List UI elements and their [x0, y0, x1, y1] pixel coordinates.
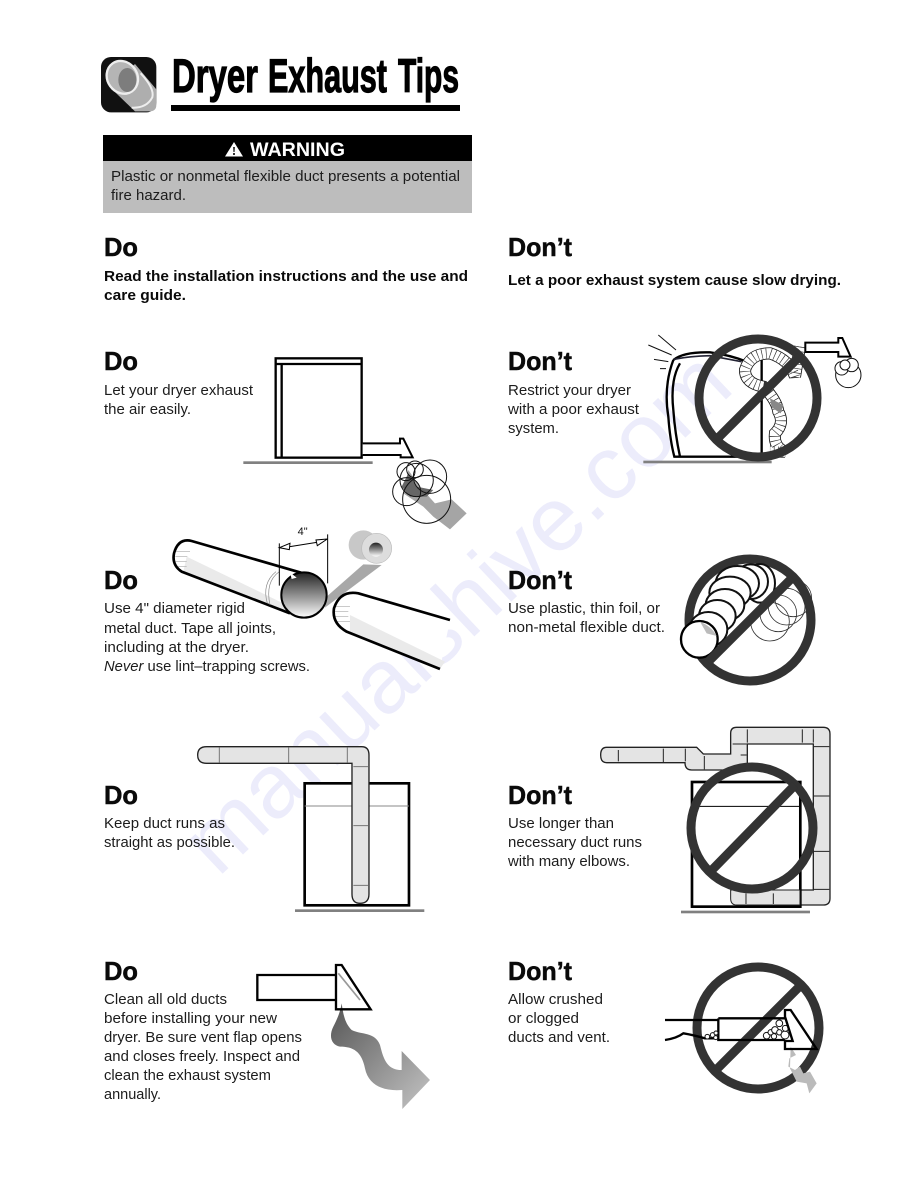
title: Dryer — [172, 49, 258, 102]
text: plastic foil — [508, 601, 665, 636]
text: clean ducts: dryer. Be sure vent flap opens — [104, 1030, 302, 1046]
text: clogged ducts: or clogged — [508, 1011, 579, 1027]
warning text: Plastic or nonmetal flexible duct presents a potential — [111, 169, 460, 185]
title: Tips — [398, 49, 459, 102]
text: long runs: Use longer than — [508, 816, 614, 832]
text: rigid metal duct: Never use lint–trapping screws. — [104, 659, 310, 675]
prohibition sign 1 — [699, 339, 817, 457]
illustration: dryer with crushed flexible duct — [643, 335, 861, 463]
illustration: straight duct run — [198, 747, 424, 912]
warning box — [103, 135, 472, 213]
heading: Don't 3: Don’t — [508, 565, 572, 595]
text: clogged ducts: ducts and vent. — [508, 1030, 610, 1046]
heading: Don't 2: Don’t — [508, 346, 572, 376]
text: rigid metal duct: Use 4" diameter rigid — [104, 601, 245, 617]
text: clean ducts: before installing your new — [104, 1011, 278, 1027]
text: clean ducts: clean the exhaust system — [104, 1068, 271, 1084]
text: straight runs: Keep duct runs as — [104, 816, 225, 832]
text: exhaust easily — [104, 383, 253, 418]
illustration: long duct with elbows — [601, 727, 830, 913]
illustration: rigid metal ducts and tape — [174, 526, 450, 669]
title rule — [171, 105, 460, 111]
text: long runs — [507, 816, 642, 870]
illustration: dryer with straight vent — [243, 358, 467, 529]
text: clogged ducts — [508, 992, 610, 1046]
text: straight runs — [104, 816, 235, 851]
text: restrict dryer — [507, 383, 639, 437]
text: exhaust easily: the air easily. — [104, 402, 191, 418]
text: restrict dryer: system. — [508, 421, 559, 437]
heading: Do 5: Do — [104, 956, 138, 986]
prohibition sign 4 — [697, 967, 819, 1089]
text: clean ducts: and closes freely. Inspect and — [104, 1049, 300, 1065]
illustration: clogged duct and vent — [665, 1010, 817, 1093]
text: clean ducts — [104, 992, 302, 1103]
heading: Do 1: Do — [104, 232, 138, 262]
heading: Don't 5: Don’t — [508, 956, 572, 986]
text: read instructions — [104, 269, 468, 304]
text: rigid metal duct — [104, 601, 310, 675]
text: plastic foil: Use plastic, thin foil, or — [508, 601, 660, 617]
illustration: flexible duct rings — [681, 564, 812, 658]
title — [172, 49, 459, 102]
text: read instructions: care guide. — [104, 288, 186, 304]
text: straight runs: straight as possible. — [104, 835, 235, 851]
text: clean ducts: annually. — [104, 1087, 161, 1103]
heading: Do 2: Do — [104, 346, 138, 376]
text: read instructions: Read the installation instructions and the use and — [104, 269, 468, 285]
dimension label: 4" — [298, 526, 308, 538]
prohibition ring 2 — [689, 559, 811, 681]
text: long runs: with many elbows. — [507, 854, 630, 870]
warning icon — [225, 142, 243, 156]
warning text line 2: fire hazard. — [111, 188, 186, 204]
text: long runs: necessary duct runs — [508, 835, 642, 851]
warning label: WARNING — [250, 140, 345, 161]
text: rigid metal duct: metal duct. Tape all joints, — [104, 621, 276, 637]
illustration: vent with air arrow — [257, 965, 430, 1109]
text: restrict dryer: with a poor exhaust — [507, 402, 639, 418]
title: Exhaust — [268, 49, 387, 102]
text: clogged ducts: Allow crushed — [508, 992, 603, 1008]
text: plastic foil: non-metal flexible duct. — [508, 620, 665, 636]
heading: Don't 1: Don’t — [508, 232, 572, 262]
prohibition slash 2 — [708, 578, 792, 662]
heading: Do 4: Do — [104, 780, 138, 810]
heading: Do 3: Do — [104, 565, 138, 595]
heading: Don't 4: Don’t — [508, 780, 572, 810]
text: poor exhaust: Let a poor exhaust system cause slow drying. — [508, 273, 841, 289]
text: rigid metal duct: including at the dryer. — [104, 640, 249, 656]
watermark: manualshive.com — [163, 331, 750, 893]
text: exhaust easily: Let your dryer exhaust — [104, 383, 253, 399]
prohibition sign 3 — [691, 767, 813, 889]
icon: duct section — [100, 55, 156, 112]
text: restrict dryer: Restrict your dryer — [508, 383, 631, 399]
text: clean ducts: Clean all old ducts — [104, 992, 227, 1008]
